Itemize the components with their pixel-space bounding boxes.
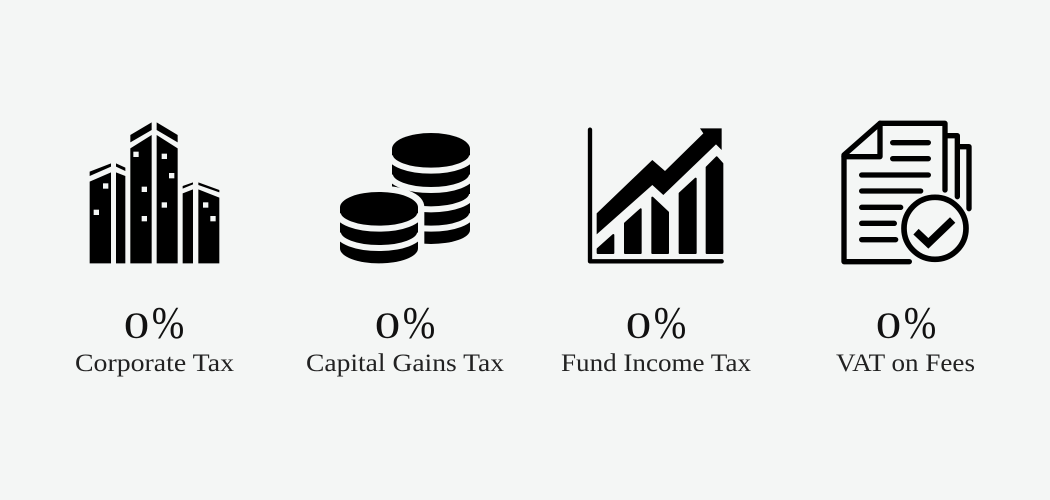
rate: fund income tax: %	[654, 298, 686, 349]
rate: vat on fees: %	[904, 298, 936, 349]
label: vat on fees: VAT on Fees	[836, 350, 975, 377]
rate: capital gains tax	[375, 298, 435, 349]
label: capital gains tax: Capital Gains Tax	[306, 350, 505, 377]
panel: corporate tax	[75, 122, 235, 377]
rate: fund income tax: 0	[626, 305, 651, 346]
panel: vat on fees	[836, 123, 975, 377]
icon: documents with check mark	[844, 123, 969, 262]
rate: capital gains tax: %	[403, 298, 435, 349]
rate: corporate tax: %	[152, 298, 184, 349]
rate: corporate tax	[124, 298, 184, 349]
rate: capital gains tax: 0	[375, 305, 400, 346]
icon: coin stacks	[338, 133, 472, 263]
rate: vat on fees: 0	[876, 305, 901, 346]
rate: fund income tax	[626, 298, 686, 349]
icon: office buildings	[90, 122, 219, 263]
panel: fund income tax	[561, 128, 752, 377]
panel: capital gains tax	[306, 133, 505, 377]
rate: corporate tax: 0	[124, 305, 149, 346]
label: fund income tax: Fund Income Tax	[561, 350, 752, 377]
rate: vat on fees	[876, 298, 936, 349]
label: corporate tax: Corporate Tax	[75, 350, 235, 377]
icon: growth chart	[590, 128, 722, 261]
